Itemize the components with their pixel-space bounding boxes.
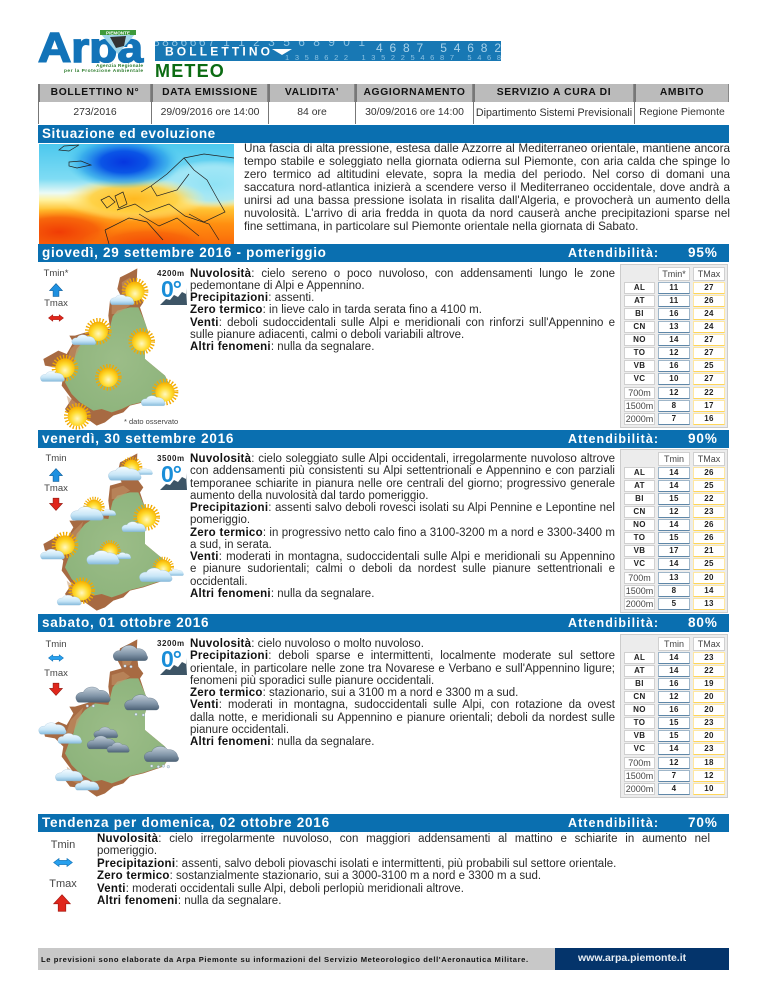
section heading: Situazione ed evoluzione: Situazione ed evoluzione [42,126,216,141]
text block: venerdì forecast: aumento della nuvolosità dal tardo pomeriggio. [190,490,428,502]
section heading: giovedì: Attendibilità: [568,246,659,260]
table: sabato temperatures: 7 [672,771,676,780]
table: sabato temperatures: 12 [669,758,679,767]
text block: giovedì forecast: Venti: deboli sudoccidentali sulle Alpi e meridionali con rinforzi sull'Appennino e [190,316,615,328]
section heading: Tendenza per domenica: 70% [688,815,718,830]
heading: METEO: METEO [155,61,225,81]
table: giovedì temperatures: 11 [669,296,679,305]
text block: sabato forecast: orientale, in particolare nelle zone tra Novarese e Verbano e sull'Appennino ligure; [190,662,615,674]
table: venerdì temperatures: 25 [704,481,714,490]
text block: situation summary: saccatura nord-atlantica inizierà a scendere verso il Mediterraneo occidentale, dove andrà a [244,181,730,194]
table: giovedì temperatures: TMax [698,269,720,279]
text block: venerdì forecast: Nuvolosità: cielo soleggiato sulle Alpi occidentali, irregolarmente nuvoloso altrove [190,453,615,465]
table: sabato temperatures: 14 [669,666,679,675]
table: bulletin information: DATA EMISSIONE [162,87,258,98]
table: giovedì temperatures: 24 [704,322,714,331]
table: sabato temperatures: 2000m [626,784,653,794]
text block: venerdì forecast: occidentali. [190,576,248,588]
table: giovedì temperatures: 24 [704,309,714,318]
table: giovedì temperatures [620,264,728,428]
banner: Bollettino: 4687 54682 [376,41,501,55]
logo: Arpa Piemonte: per la Protezione Ambientale [64,68,143,74]
table: venerdì temperatures: 8 [672,586,676,595]
icon: zero termico 4200m: 0° [161,276,181,302]
table: sabato temperatures: CN [633,692,646,701]
text block: venerdì forecast: Venti: moderati in montagna, sudoccidentali sulle Alpi e meridionali su Appennino [190,551,615,563]
text block: domenica forecast: Venti: moderati occidentali sulle Alpi, deboli perlopiù meridionali altrove. [97,883,464,895]
section heading: Tendenza per domenica [38,814,729,832]
table: giovedì temperatures: CN [633,322,646,331]
table: bulletin information: BOLLETTINO N° [51,87,139,98]
table: sabato temperatures: 19 [704,679,714,688]
table: sabato temperatures: TO [634,718,645,727]
table: sabato temperatures: AT [634,666,645,675]
table: sabato temperatures: VC [634,744,645,753]
table: venerdì temperatures: 22 [704,494,714,503]
table: giovedì temperatures: NO [633,335,646,344]
text block: venerdì forecast: Zero termico: in progressivo netto calo fino a 3100-3200 m a nord e 3300-3400 m [190,526,615,538]
table: venerdì temperatures: TMax [698,454,720,464]
text block: venerdì forecast: e pianure sudorientali; calmi o deboli da nordest sulle pianure settentrionali e [190,563,615,575]
section heading: venerdì: Attendibilità: [568,432,659,446]
table: venerdì temperatures: NO [633,520,646,529]
text block: situation summary: zero termico ad altitudini elevate, sopra la media del periodo. Nel corso di domani una [244,168,730,181]
table: venerdì temperatures: 20 [704,573,714,582]
table: sabato temperatures: 20 [704,731,714,740]
panel: giovedì map with sun and cloud icons [40,268,178,430]
icon: zero termico 3200m [157,639,187,675]
section heading: venerdì: venerdì, 30 settembre 2016 [42,431,234,446]
table: venerdì temperatures: 23 [704,507,714,516]
table: sabato temperatures: Tmin [664,639,684,649]
table: bulletin information: AMBITO [660,87,704,98]
text block: domenica forecast: Altri fenomeni: nulla da segnalare. [97,895,281,907]
table: giovedì temperatures: 27 [704,335,714,344]
logo: Arpa Piemonte: Arpa [38,24,144,71]
icon: zero termico 3200m: 3200m [157,639,185,648]
legend: giovedì temperature trends: Tmin* [44,268,68,279]
table: venerdì temperatures: 15 [669,494,679,503]
text block: sabato forecast: fenomeni più sporadici sulle pianure occidentali. [190,675,434,687]
text block: sabato forecast: pianure occidentali. [190,724,289,736]
legend: venerdì temperature trends [44,453,68,511]
text block: giovedì forecast: Altri fenomeni: nulla da segnalare. [190,341,374,353]
table: sabato temperatures: 16 [669,679,679,688]
table: venerdì temperatures: 21 [704,546,714,555]
text block: venerdì forecast [190,453,615,600]
text block: venerdì forecast: temporanee schiarite in pianura nelle ore centrali del giorno; progressivo generale [190,478,615,490]
table: sabato temperatures: NO [633,705,646,714]
table: bulletin information: Dipartimento Sistemi Previsionali [476,107,632,119]
table: giovedì temperatures: 16 [669,309,679,318]
text block: venerdì forecast: Precipitazioni: assenti salvo deboli rovesci isolati su Alpi Pennine e Lepontine nel [190,502,615,514]
table: giovedì temperatures: 25 [704,361,714,370]
table: venerdì temperatures: 25 [704,559,714,568]
table: venerdì temperatures: 26 [704,533,714,542]
table: giovedì temperatures: AT [634,296,645,305]
logo: Arpa Piemonte: PIEMONTE [106,30,130,35]
text block: situation summary: unirsi ad una bassa pressione isolata in risalita dall'Algeria, e provocherà un aumento della [244,194,730,207]
text block: venerdì forecast: a sud, in serata. [190,539,272,551]
section heading: sabato [38,614,729,632]
table: bulletin information [38,84,729,124]
table: venerdì temperatures: VC [634,559,645,568]
text block: giovedì forecast: Precipitazioni: assenti. [190,292,314,304]
table: venerdì temperatures: AL [634,468,645,477]
icon: zero termico 3200m: 0° [161,646,181,672]
banner: Bollettino: BOLLETTINO [165,44,270,58]
footer: source note: Le previsioni sono elaborate da Arpa Piemonte su informazioni del Servizio Meteorologico dell'Aeronautica Militare. [41,955,529,964]
table: sabato temperatures: 20 [704,705,714,714]
table: giovedì temperatures: 12 [669,388,679,397]
icon: zero termico 3500m: 3500m [157,454,185,463]
note: dato osservato: * dato osservato [124,417,178,426]
table: giovedì temperatures: 26 [704,296,714,305]
table: giovedì temperatures: Tmin* [662,269,686,279]
table: sabato temperatures [620,634,728,798]
text block: situation summary: tempo stabile e soleggiato nella giornata odierna sul Piemonte, con aria calda che spinge lo [244,155,730,168]
legend: venerdì temperature trends: Tmin [45,453,67,464]
table: giovedì temperatures: 10 [669,374,679,383]
table: venerdì temperatures: Tmin [664,454,684,464]
table: sabato temperatures: 700m [628,758,651,768]
table: sabato temperatures: 15 [669,718,679,727]
legend: sabato temperature trends: Tmin [45,639,67,650]
table: venerdì temperatures: 26 [704,520,714,529]
text block: domenica forecast: pomeriggio. [97,845,157,857]
table: bulletin information: SERVIZIO A CURA DI [497,87,611,98]
text block: domenica forecast [97,833,710,907]
text block: sabato forecast: Zero termico: stazionario, sui a 3100 m a nord e 3300 m a sud. [190,687,518,699]
section heading: venerdì: 90% [688,431,718,446]
text block: domenica forecast: Zero termico: sostanzialmente stazionario, sui a 3000-3100 m a nord e 3300 m a sud. [97,870,541,882]
table: venerdì temperatures: AT [634,481,645,490]
table: bulletin information: 29/09/2016 ore 14:00 [161,107,259,118]
table: giovedì temperatures: 700m [628,388,651,398]
text block: sabato forecast: Nuvolosità: cielo nuvoloso o molto nuvoloso. [190,638,424,650]
table: venerdì temperatures: 14 [669,559,679,568]
panel: venerdì map with sun and cloud icons [40,453,184,611]
table: giovedì temperatures: 22 [704,388,714,397]
text block: situation summary: Una fascia di alta pressione, estesa dalle Azzorre al Mediterraneo orientale, mantiene ancora [244,142,730,155]
icon: zero termico 4200m [157,269,187,305]
section heading: sabato: sabato, 01 ottobre 2016 [42,615,209,630]
table: giovedì temperatures: 27 [704,374,714,383]
text block: sabato forecast [190,638,615,748]
table: giovedì temperatures: AL [634,283,645,292]
table: venerdì temperatures: 2000m [626,599,653,609]
table: giovedì temperatures: 17 [704,401,714,410]
table: giovedì temperatures: 2000m [626,414,653,424]
legend: giovedì temperature trends [44,268,68,322]
chart: synoptic map of Europe [39,144,234,244]
icon: zero termico 3500m [157,454,187,490]
table: giovedì temperatures: TO [634,348,645,357]
table: sabato temperatures: 16 [669,705,679,714]
table: venerdì temperatures: 13 [669,573,679,582]
table: venerdì temperatures: 14 [704,586,714,595]
text block: domenica forecast: Nuvolosità: cielo irregolarmente nuvoloso, con maggiori addensamenti al mattino e schiarite in aumento nel [97,833,710,845]
table: venerdì temperatures: BI [635,494,644,503]
table: giovedì temperatures: 13 [669,322,679,331]
legend: venerdì temperature trends: Tmax [44,483,68,494]
section heading: giovedì [38,244,729,262]
text block: domenica forecast: Precipitazioni: assenti, salvo deboli piovaschi isolati e intermittenti, più probabili sul settore orientale. [97,858,616,870]
table: sabato temperatures: VB [634,731,645,740]
table: venerdì temperatures: CN [633,507,646,516]
table: venerdì temperatures: 14 [669,468,679,477]
table: giovedì temperatures: 8 [672,401,676,410]
table: bulletin information: AGGIORNAMENTO [363,87,466,98]
table: venerdì temperatures: 12 [669,507,679,516]
table: sabato temperatures: 14 [669,744,679,753]
table: venerdì temperatures: 26 [704,468,714,477]
section heading: sabato: 80% [688,615,718,630]
table: giovedì temperatures: 1500m [626,401,653,411]
table: giovedì temperatures: 27 [704,348,714,357]
table: giovedì temperatures: 16 [704,414,714,423]
table: venerdì temperatures: 15 [669,533,679,542]
text block: giovedì forecast [190,268,615,353]
text block: venerdì forecast: con addensamenti più consistenti su Alpi settentrionali e Appennino e con parziali [190,465,615,477]
section heading: giovedì: 95% [688,245,718,260]
table: venerdì temperatures: 1500m [626,586,653,596]
table: sabato temperatures: 4 [672,784,676,793]
table: bulletin information: 273/2016 [73,107,117,118]
table: bulletin information: 30/09/2016 ore 14:00 [365,107,464,118]
table: bulletin information: 84 ore [297,107,327,118]
table: sabato temperatures: 10 [704,784,714,793]
table: sabato temperatures: 23 [704,744,714,753]
section heading: giovedì: giovedì, 29 settembre 2016 - pomeriggio [42,245,327,260]
legend: sabato temperature trends: Tmax [44,668,68,679]
table: sabato temperatures: 23 [704,718,714,727]
legend: giovedì temperature trends: Tmax [44,298,68,309]
icon: zero termico 3500m: 0° [161,461,181,487]
table: sabato temperatures: 18 [704,758,714,767]
text block: venerdì forecast: Altri fenomeni: nulla da segnalare. [190,588,374,600]
section heading: venerdì [38,430,729,448]
text block: giovedì forecast: Zero termico: in lieve calo in tarda serata fino a 4100 m. [190,304,482,316]
table: sabato temperatures: TMax [698,639,720,649]
section heading: sabato: Attendibilità: [568,616,659,630]
table: sabato temperatures: 12 [704,771,714,780]
table: giovedì temperatures: 14 [669,335,679,344]
text block: giovedì forecast: pedemontane di Alpi e Appennino. [190,280,365,292]
table: venerdì temperatures: 14 [669,520,679,529]
table: venerdì temperatures: 700m [628,573,651,583]
table: venerdì temperatures: 17 [669,546,679,555]
text block: sabato forecast: Altri fenomeni: nulla da segnalare. [190,736,374,748]
table: giovedì temperatures: BI [635,309,644,318]
text block: situation summary: fine settimana, in particolare sul Piemonte orientale nella giornata di Sabato. [244,220,638,233]
table: venerdì temperatures: 14 [669,481,679,490]
section heading: Tendenza per domenica: Attendibilità: [568,816,659,830]
table: venerdì temperatures: 5 [672,599,676,608]
table: giovedì temperatures: 11 [669,283,679,292]
icon: zero termico 4200m: 4200m [157,269,185,278]
table: giovedì temperatures: 27 [704,283,714,292]
table: sabato temperatures: 1500m [626,771,653,781]
footer: source note [38,948,555,970]
banner: Bollettino [155,41,501,61]
table: giovedì temperatures: VB [634,361,645,370]
table: bulletin information: Regione Piemonte [639,107,725,118]
legend: domenica temperature trends: Tmin [51,839,75,851]
logo: Arpa Piemonte: Agenzia Regionale [96,63,143,69]
table: venerdì temperatures: TO [634,533,645,542]
text block: situation summary: nuvolosità. L'arrivo di aria fredda in quota da nord causerà anche precipitazioni sparse nel [244,207,730,220]
table: giovedì temperatures: VC [634,374,645,383]
table: giovedì temperatures: 16 [669,361,679,370]
table: sabato temperatures: 23 [704,653,714,662]
table: sabato temperatures: 22 [704,666,714,675]
section heading: Situazione ed evoluzione [38,125,729,143]
table: venerdì temperatures: VB [634,546,645,555]
section heading: Tendenza per domenica: Tendenza per domenica, 02 ottobre 2016 [42,815,330,830]
text block: giovedì forecast: Nuvolosità: cielo sereno o poco nuvoloso, con addensamenti lungo le zone [190,268,615,280]
text block: venerdì forecast: pomeriggio. [190,514,250,526]
legend: domenica temperature trends [49,839,77,912]
legend: domenica temperature trends: Tmax [49,878,77,890]
legend: sabato temperature trends [44,639,68,696]
footer: website [555,948,729,970]
text block: sabato forecast: Precipitazioni: deboli sparse e intermittenti, localmente moderate sul settore [190,650,615,662]
table: sabato temperatures: 15 [669,731,679,740]
table: bulletin information: VALIDITA' [285,87,339,98]
table: giovedì temperatures: 7 [672,414,676,423]
table: sabato temperatures: 20 [704,692,714,701]
table: sabato temperatures: AL [634,653,645,662]
text block: giovedì forecast: sulle pianure adiacenti, calmi o deboli variabili altrove. [190,329,464,341]
text block: sabato forecast: Venti: moderati in montagna, sudoccidentali sulle Alpi, con rotazione da ovest [190,699,615,711]
footer: website: www.arpa.piemonte.it [578,952,686,964]
text block: situation summary [244,142,730,233]
table: venerdì temperatures [620,449,728,613]
table: sabato temperatures: 12 [669,692,679,701]
table: giovedì temperatures: 12 [669,348,679,357]
text block: sabato forecast: dalla notte, e meridionali su Appennino e pianure orientali; deboli da nordest sulle [190,712,615,724]
table: sabato temperatures: BI [635,679,644,688]
table: sabato temperatures: 14 [669,653,679,662]
table: venerdì temperatures: 13 [704,599,714,608]
panel: sabato map with cloud icons [38,639,179,797]
